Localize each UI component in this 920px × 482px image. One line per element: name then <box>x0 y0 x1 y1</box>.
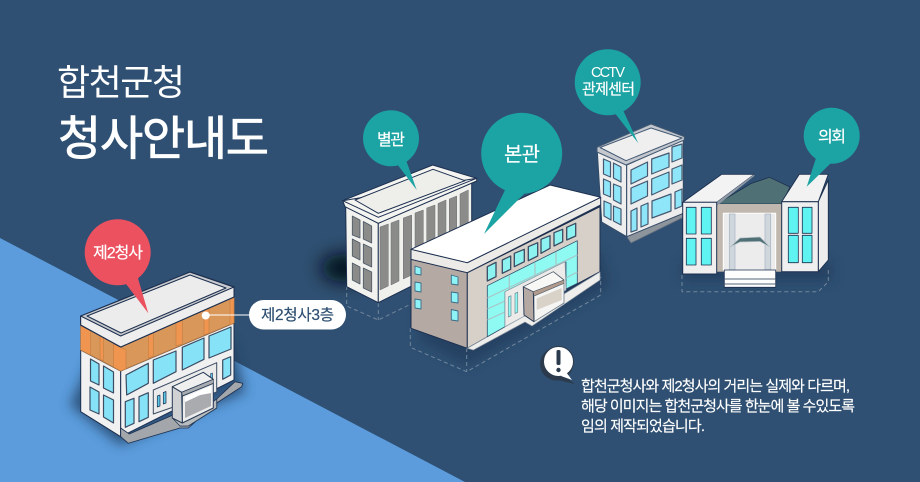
glass <box>487 241 577 337</box>
title: 합천군청 <box>57 62 185 103</box>
bubble: 본관 <box>481 113 562 234</box>
bubble: 제2청사: 제2청사 <box>93 244 143 262</box>
building: 제2청사 <box>70 272 245 445</box>
building: 의회 <box>682 174 832 292</box>
title: 청사안내도 <box>58 112 269 165</box>
canopy <box>534 283 564 322</box>
bubble: 의회 <box>804 108 860 187</box>
plinth <box>467 272 600 350</box>
title <box>57 62 269 165</box>
bubble: 본관: 본관 <box>504 143 540 166</box>
bubble: CCTV 관제센터: CCTV <box>591 65 625 81</box>
bubble: 별관: 별관 <box>377 131 405 149</box>
note text: 합천군청사와 제2청사의 거리는 실제와 다르며, <box>581 378 850 395</box>
bubble: 의회: 의회 <box>818 128 846 146</box>
plinth <box>121 382 243 443</box>
note text <box>581 378 855 435</box>
note text: 해당 이미지는 합천군청사를 한눈에 볼 수있도록 <box>581 398 855 415</box>
bubble: 별관 <box>363 110 419 190</box>
icon: exclamation bubble <box>540 346 575 384</box>
building: CCTV 관제센터 <box>597 124 686 243</box>
callout: 제2청사3층: 제2청사3층 <box>261 306 334 324</box>
building: 본관 <box>410 185 610 372</box>
door panel <box>153 363 217 414</box>
bubble: 제2청사 <box>85 219 151 313</box>
callout: 제2청사3층 <box>202 300 346 330</box>
orange band <box>81 297 234 371</box>
note text: 임의 제작되었습니다. <box>581 418 705 435</box>
bubble: CCTV 관제센터 <box>575 49 641 143</box>
bubble: CCTV 관제센터: 관제센터 <box>582 81 635 98</box>
canopy <box>172 399 217 426</box>
building: 별관 <box>321 165 477 320</box>
light blue ground <box>0 238 465 482</box>
